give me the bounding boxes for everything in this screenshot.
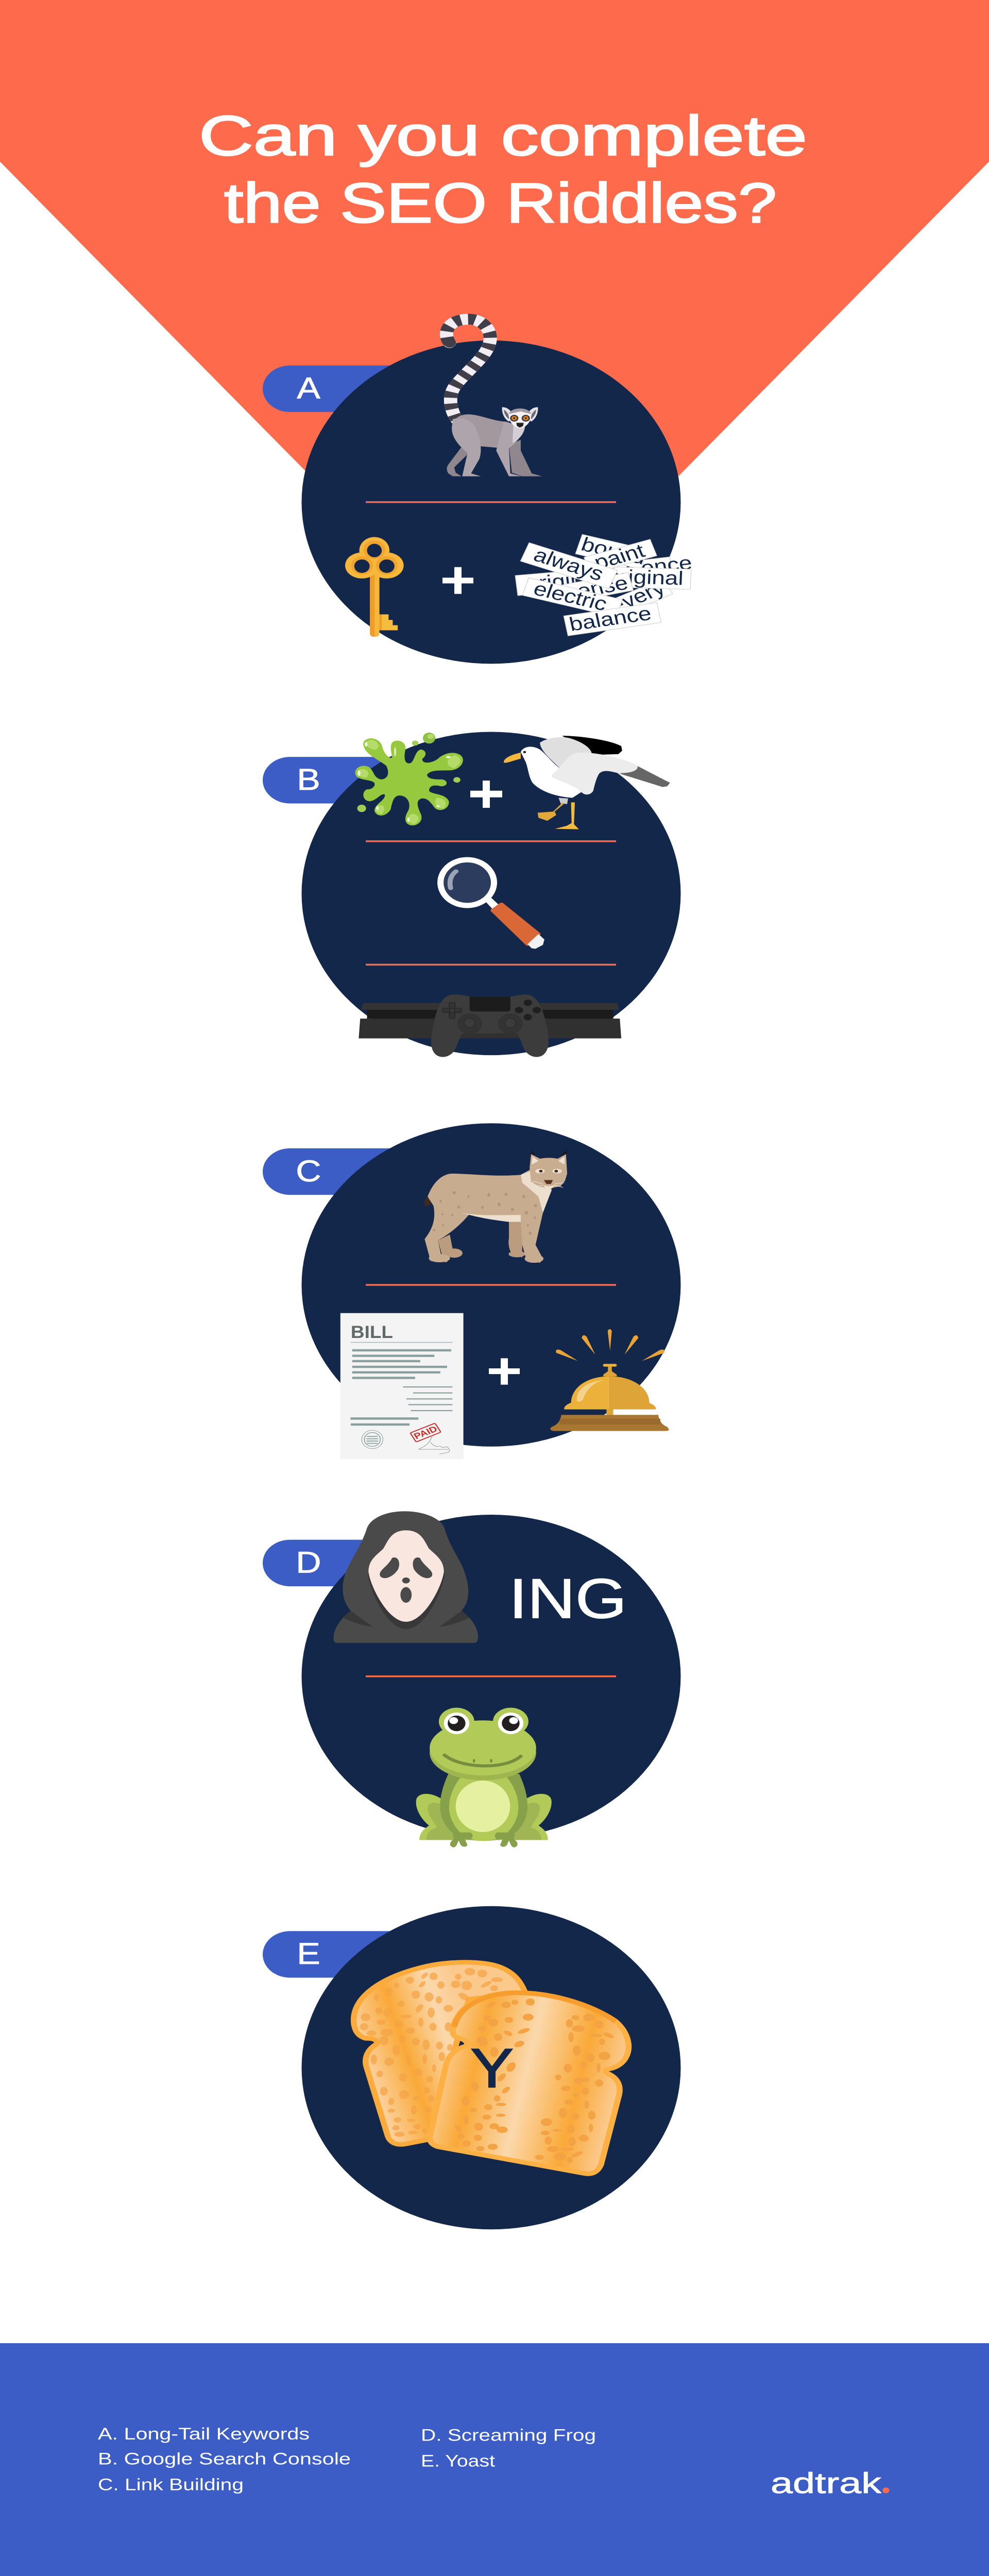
- answers column 2: E. Yoast: [421, 2452, 495, 2470]
- plus sign A: [442, 567, 473, 594]
- illustration: scattered word cards: always: [530, 544, 607, 585]
- illustration: game console and controller: [359, 994, 621, 1057]
- answers column 1: B. Google Search Console: [98, 2450, 351, 2468]
- answers column 2: [421, 2426, 596, 2470]
- illustration: scattered word cards: science: [610, 551, 694, 582]
- answers column 1: [98, 2425, 351, 2494]
- illustration: toast slices: [354, 1962, 628, 2174]
- badge: B: B: [297, 764, 320, 796]
- illustration: ring-tailed lemur: [444, 319, 542, 476]
- illustration: service bell: [550, 1329, 669, 1431]
- answers column 2: D. Screaming Frog: [421, 2426, 596, 2445]
- text: Y: Y: [470, 2038, 514, 2099]
- illustration: scattered word cards: every: [605, 577, 669, 617]
- circle B: [302, 732, 681, 1055]
- illustration: green slime splat: [355, 733, 463, 825]
- illustration: paid bill document: PAID: [412, 1424, 439, 1441]
- illustration: paid bill document: [340, 1313, 464, 1459]
- illustration: scattered word cards: bound: [578, 533, 649, 569]
- logo: adtrak: adtrak: [771, 2466, 881, 2499]
- illustration: key: [345, 537, 404, 637]
- illustration: seagull: [504, 736, 670, 829]
- header: orange funnel background: [0, 0, 989, 663]
- badge: E: E: [297, 1938, 320, 1971]
- panel: riddle B: [263, 732, 681, 1057]
- answers column 1: A. Long-Tail Keywords: [98, 2425, 310, 2443]
- illustration: scattered word cards: origin: [524, 568, 585, 595]
- title: the SEO Riddles?: [224, 172, 777, 234]
- circle A: [302, 341, 681, 664]
- circle E: [302, 1906, 681, 2229]
- illustration: scattered word cards: paint: [591, 539, 648, 573]
- panel: riddle D: [263, 1511, 681, 1848]
- answers column 1: C. Link Building: [98, 2476, 244, 2494]
- badge: D: [263, 1540, 428, 1586]
- badge: A: [263, 365, 428, 412]
- footer band: [0, 2343, 989, 2576]
- plus sign B: [470, 781, 502, 808]
- illustration: scattered word cards: balance: [567, 602, 653, 635]
- illustration: paid bill document: BILL: [351, 1323, 393, 1342]
- illustration: scattered word cards: sense: [563, 571, 630, 604]
- divider A: [366, 501, 616, 503]
- illustration: magnifying glass: [437, 857, 544, 949]
- divider B2: [366, 964, 616, 965]
- divider C: [366, 1284, 616, 1286]
- title: Can you complete: [199, 105, 807, 167]
- plus sign C: [489, 1358, 520, 1385]
- badge: C: [263, 1148, 428, 1195]
- panel: riddle A: [263, 319, 694, 664]
- illustration: scattered word cards: electric: [531, 577, 610, 615]
- illustration: ghostface mask: [334, 1511, 478, 1643]
- panel: riddle E: [263, 1906, 681, 2229]
- divider B1: [366, 840, 616, 842]
- badge: D: D: [296, 1546, 321, 1579]
- panel: riddle C: [263, 1123, 681, 1459]
- circle C: [302, 1123, 681, 1447]
- text: ING: ING: [509, 1567, 627, 1630]
- illustration: scattered word cards: [515, 532, 694, 636]
- circle D: [302, 1515, 681, 1838]
- illustration: frog: [416, 1708, 552, 1848]
- badge: A: A: [297, 372, 321, 405]
- divider D: [366, 1675, 616, 1677]
- badge: C: C: [296, 1155, 321, 1188]
- badge: E: [263, 1931, 428, 1978]
- illustration: scattered word cards: original: [607, 565, 684, 589]
- illustration: lynx: [424, 1149, 567, 1263]
- badge: B: [263, 757, 428, 804]
- title: [199, 105, 807, 234]
